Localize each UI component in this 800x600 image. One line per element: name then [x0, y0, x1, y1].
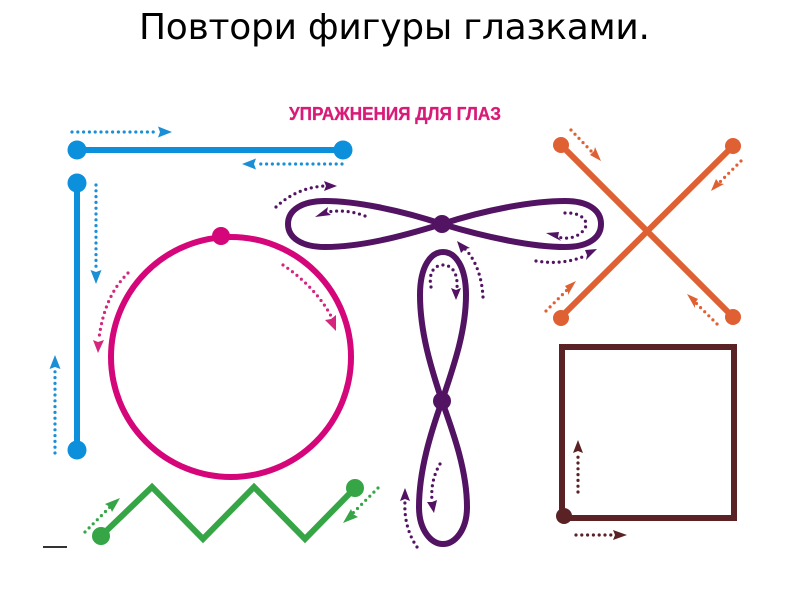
- heading: eye exercises: УПРАЖНЕНИЯ ДЛЯ ГЛАЗ: [289, 104, 501, 124]
- short dash mark: [43, 546, 67, 548]
- figure: horizontal figure eight: [276, 181, 601, 262]
- figure: brown square: [556, 347, 734, 540]
- figure: blue vertical line: [50, 174, 102, 460]
- figure: green zigzag: [85, 479, 378, 545]
- figure: pink circle: [93, 227, 351, 477]
- figure: vertical figure eight: [400, 241, 483, 547]
- figure: blue horizontal line: [68, 126, 352, 170]
- figure: orange cross: [546, 130, 741, 326]
- title: Повтори фигуры глазками.: [139, 7, 650, 48]
